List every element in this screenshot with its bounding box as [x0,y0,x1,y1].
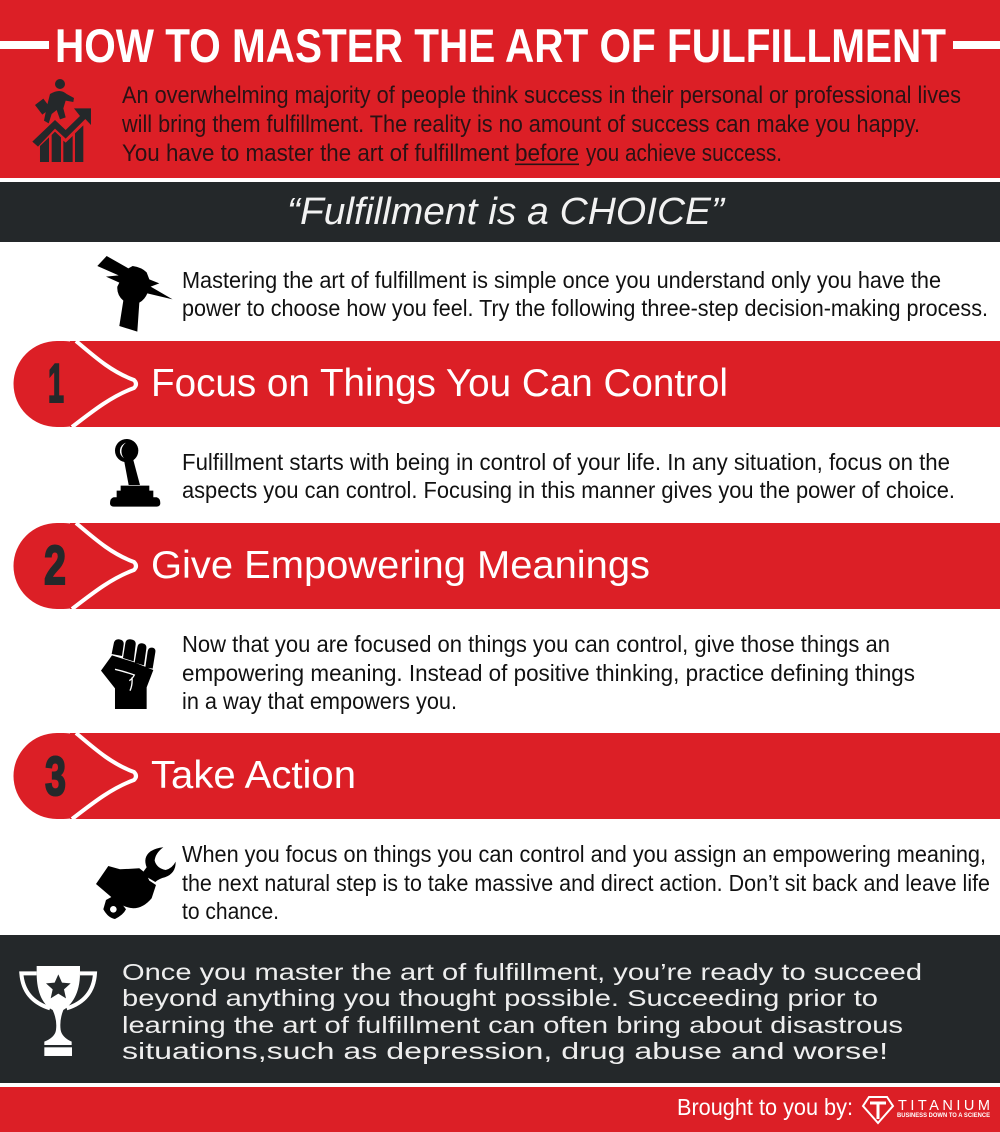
intro text: you achieve success. [586,140,782,167]
step heading: Focus on Things You Can Control [151,362,728,405]
logo: Titanium: BUSINESS DOWN TO A SCIENCE [897,1113,990,1119]
intro text: You have to master the art of fulfillment [122,140,509,167]
text: introduction: Mastering the art of fulfillment is simple once you understand only you have the [182,267,941,293]
text: step 1 body [182,449,955,503]
logo: Titanium: TITANIUM [898,1098,990,1114]
panel: footer [0,1087,1000,1132]
text: step 3 body [182,841,990,924]
conclusion text: beyond anything you thought possible. Succeeding prior to [122,985,878,1011]
icon: hand gripping lightning bolt [97,256,173,332]
footer text: Brought to you by: [677,1094,853,1120]
step heading: Give Empowering Meanings [151,544,650,587]
text: step 1 body: Fulfillment starts with being in control of your life. In any situation, focus on the [182,449,950,475]
step number: 2 [44,534,66,596]
panel: header [0,0,1000,178]
icon: hand holding wrench [96,847,176,919]
step 3 banner [13,733,1000,819]
text: step 2 body [182,631,915,714]
intro text: will bring them fulfillment. The reality is no amount of success can make you happy. [121,111,920,138]
intro text [121,82,961,167]
panel: conclusion [0,935,1000,1083]
text: step 3 body: to chance. [182,898,279,924]
step number: 3 [45,745,66,807]
conclusion text: situations,such as depression, drug abuse and worse! [122,1038,888,1064]
icon: climbing businessman on chart [32,79,91,162]
conclusion text [122,959,922,1064]
conclusion text: learning the art of fulfillment can often bring about disastrous [122,1012,903,1038]
conclusion text: Once you master the art of fulfillment, you’re ready to succeed [122,959,922,985]
icon: joystick [110,439,160,507]
step 2 banner [13,523,1000,609]
logo: Titanium [863,1097,990,1123]
panel: quote banner [0,182,1000,242]
text: introduction [182,267,988,321]
quote: “Fulfillment is a CHOICE” [287,191,726,233]
icon: raised fist [101,639,155,709]
text: step 2 body: empowering meaning. Instead of positive thinking, practice defining things [182,660,915,686]
text: step 2 body: Now that you are focused on things you can control, give those things an [182,631,890,657]
icon: trophy [21,966,95,1056]
step number: 1 [48,352,64,414]
step heading: Take Action [151,754,356,797]
text: step 2 body: in a way that empowers you. [182,688,457,714]
intro text: before [515,140,579,167]
step 1 banner [14,341,1000,427]
text: step 1 body: aspects you can control. Focusing in this manner gives you the power of choice. [182,477,955,503]
